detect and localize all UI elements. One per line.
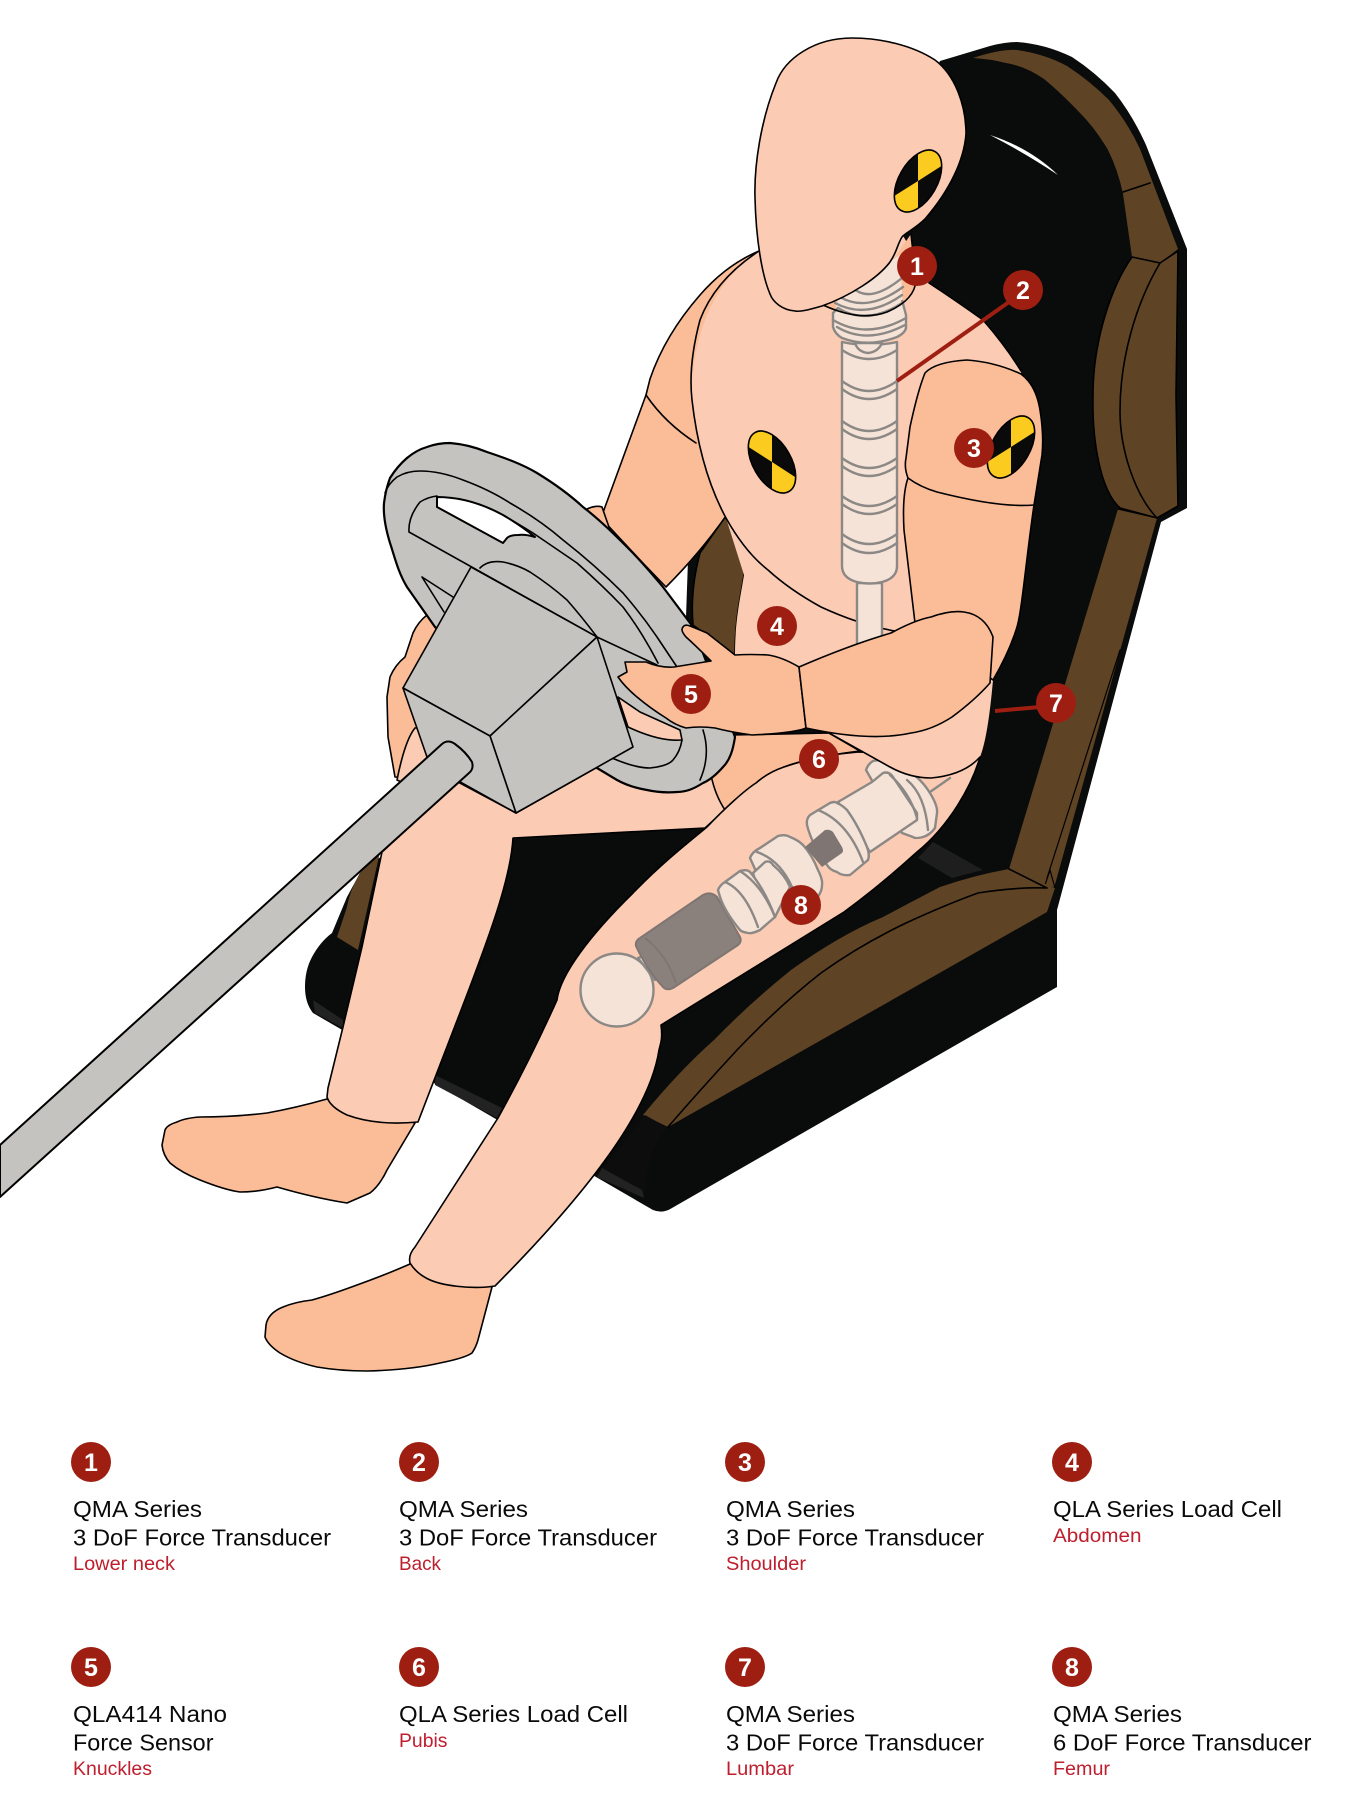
seat side strip: [1009, 509, 1157, 888]
barrel end arc: [890, 775, 917, 818]
wing inner contour: [1120, 183, 1160, 518]
left foot: [162, 1099, 415, 1203]
legend item 2: QMA Series: [399, 1496, 528, 1522]
femur load sensor: [580, 760, 950, 1026]
thin rod: [930, 778, 950, 792]
front flange: [807, 802, 869, 875]
legend item 8: [1052, 1647, 1312, 1780]
target: chest: [748, 430, 796, 494]
spine body: [842, 342, 897, 584]
legend item 3: [725, 1442, 984, 1575]
large flange arc: [757, 852, 792, 887]
legend item 4: [1052, 1442, 1282, 1547]
connecting rod: [805, 830, 843, 867]
right thigh and shin: [410, 752, 980, 1287]
legend item 8: 6 DoF Force Transducer: [1053, 1730, 1312, 1756]
cushion contour: [668, 869, 1047, 1127]
target: head: [894, 149, 942, 213]
legend item 4: Abdomen: [1053, 1525, 1142, 1547]
legend item 2: 2: [412, 1449, 426, 1477]
legend item 1: [71, 1442, 331, 1575]
headrest slot highlight: [990, 135, 1058, 175]
right foot: [265, 1264, 492, 1371]
wheel rim: [384, 443, 735, 792]
legend item 5: 5: [84, 1654, 98, 1682]
callout 5: [671, 674, 711, 714]
seat shell: [305, 42, 1187, 1212]
legend item 3: QMA Series: [726, 1496, 855, 1522]
connector: [723, 895, 750, 925]
callout 5: 5: [684, 681, 698, 709]
wheel contour lines: [385, 471, 706, 780]
legend item 5: QLA414 Nano: [73, 1701, 227, 1727]
knee ball: [580, 954, 654, 1026]
callout 3: [954, 428, 994, 468]
seat cushion side: [643, 869, 1055, 1127]
washer: [718, 870, 775, 933]
belly fold line: [829, 733, 980, 778]
legend item 7: [725, 1647, 984, 1780]
legend item 7: 7: [738, 1654, 752, 1682]
gray cylinder end arc: [645, 938, 676, 983]
legend item 2: Back: [399, 1553, 441, 1575]
target: shoulder: [986, 415, 1036, 479]
hub right face: [490, 637, 633, 813]
legend item 4: QLA Series Load Cell: [1053, 1496, 1282, 1522]
upper arm lower section: [904, 478, 1034, 680]
far knee outer: [387, 615, 470, 780]
crash test dummy: [162, 38, 1053, 1371]
hub left face: [403, 688, 516, 813]
callout 4: [757, 606, 797, 646]
left brown panel: [692, 517, 744, 655]
spine sensor column: [833, 255, 906, 650]
legend item 6: QLA Series Load Cell: [399, 1701, 628, 1727]
chest outline: [646, 251, 1021, 631]
near hand: [618, 625, 806, 735]
legend item 5: Force Sensor: [73, 1730, 214, 1756]
legend item 4: 4: [1065, 1449, 1079, 1477]
lower spine rod: [857, 583, 882, 650]
legend item 7: QMA Series: [726, 1701, 855, 1727]
strip contour lines: [1038, 509, 1157, 906]
legend item 1: QMA Series: [73, 1496, 202, 1522]
rear flange arc: [907, 780, 928, 830]
barrel: [838, 772, 917, 852]
hub top face: [403, 567, 597, 736]
legend item 8: QMA Series: [1053, 1701, 1182, 1727]
neck outline: [823, 234, 916, 316]
belly fold: [829, 680, 993, 778]
neck rings: [833, 278, 906, 336]
large flange: [750, 835, 822, 915]
callout 4: 4: [770, 613, 784, 641]
middle ring: [753, 861, 790, 917]
car seat: [305, 42, 1187, 1212]
opening showing skin: [618, 697, 682, 740]
legend item 5: [71, 1647, 227, 1780]
washer arcs: [725, 871, 775, 927]
far knee inner: [397, 720, 460, 800]
legend item 3: Shoulder: [726, 1553, 807, 1575]
rear flange: [866, 760, 937, 838]
far arm: [601, 251, 760, 587]
legend item 2: [399, 1442, 657, 1575]
far hand sliver: [587, 506, 610, 530]
spine rings: [842, 350, 897, 553]
callout 1: 1: [910, 253, 924, 281]
legend item 6: 6: [412, 1654, 426, 1682]
left leg and pelvis: [327, 700, 733, 1123]
legend item 5: Knuckles: [73, 1758, 152, 1780]
neck body: [833, 255, 906, 318]
callout 6: 6: [812, 746, 826, 774]
torso fill: [692, 230, 1030, 778]
legend item 1: 3 DoF Force Transducer: [73, 1524, 331, 1550]
legend item 1: Lower neck: [73, 1553, 175, 1575]
legend item 7: 3 DoF Force Transducer: [726, 1730, 984, 1756]
dark seat belt strip: [918, 842, 983, 878]
legend item 8: Femur: [1053, 1758, 1111, 1780]
legend: [71, 1442, 1312, 1780]
callout 7 with leader: [995, 683, 1076, 723]
legend item 3: 3 DoF Force Transducer: [726, 1524, 984, 1550]
seat back rim: [973, 50, 1178, 263]
steering column: [0, 742, 473, 1197]
legend item 2: 3 DoF Force Transducer: [399, 1524, 657, 1550]
callout 8: 8: [794, 892, 808, 920]
front flange arc: [818, 810, 863, 862]
cushion front corner: [597, 1115, 668, 1198]
gray cylinder: [636, 893, 741, 989]
callout 8: [781, 885, 821, 925]
steering wheel: [0, 443, 735, 1197]
wheel opening: [437, 497, 535, 543]
neck cup: [855, 343, 882, 353]
knee neck: [638, 953, 665, 980]
groin: [711, 733, 860, 810]
cushion trim strips: [313, 1000, 644, 1198]
lower left brown panel: [337, 852, 380, 950]
callout 6: [799, 739, 839, 779]
neck flange: [833, 300, 906, 343]
legend item 6: Pubis: [399, 1730, 448, 1752]
head: [755, 38, 966, 311]
shoulder: [905, 360, 1043, 505]
neck skin fill: [823, 234, 916, 316]
callout 7 with leader: 7: [1049, 690, 1063, 718]
callout 1: [897, 246, 937, 286]
seat back wing: [1093, 251, 1178, 518]
legend item 6: [399, 1647, 628, 1752]
callout 2 with leader: [897, 270, 1043, 381]
legend item 1: 1: [84, 1449, 98, 1477]
legend item 3: 3: [738, 1449, 752, 1477]
callout 2 with leader: 2: [1016, 277, 1030, 305]
callout 3: 3: [967, 435, 981, 463]
near forearm: [799, 612, 993, 737]
legend item 8: 8: [1065, 1654, 1079, 1682]
legend item 7: Lumbar: [726, 1758, 795, 1780]
